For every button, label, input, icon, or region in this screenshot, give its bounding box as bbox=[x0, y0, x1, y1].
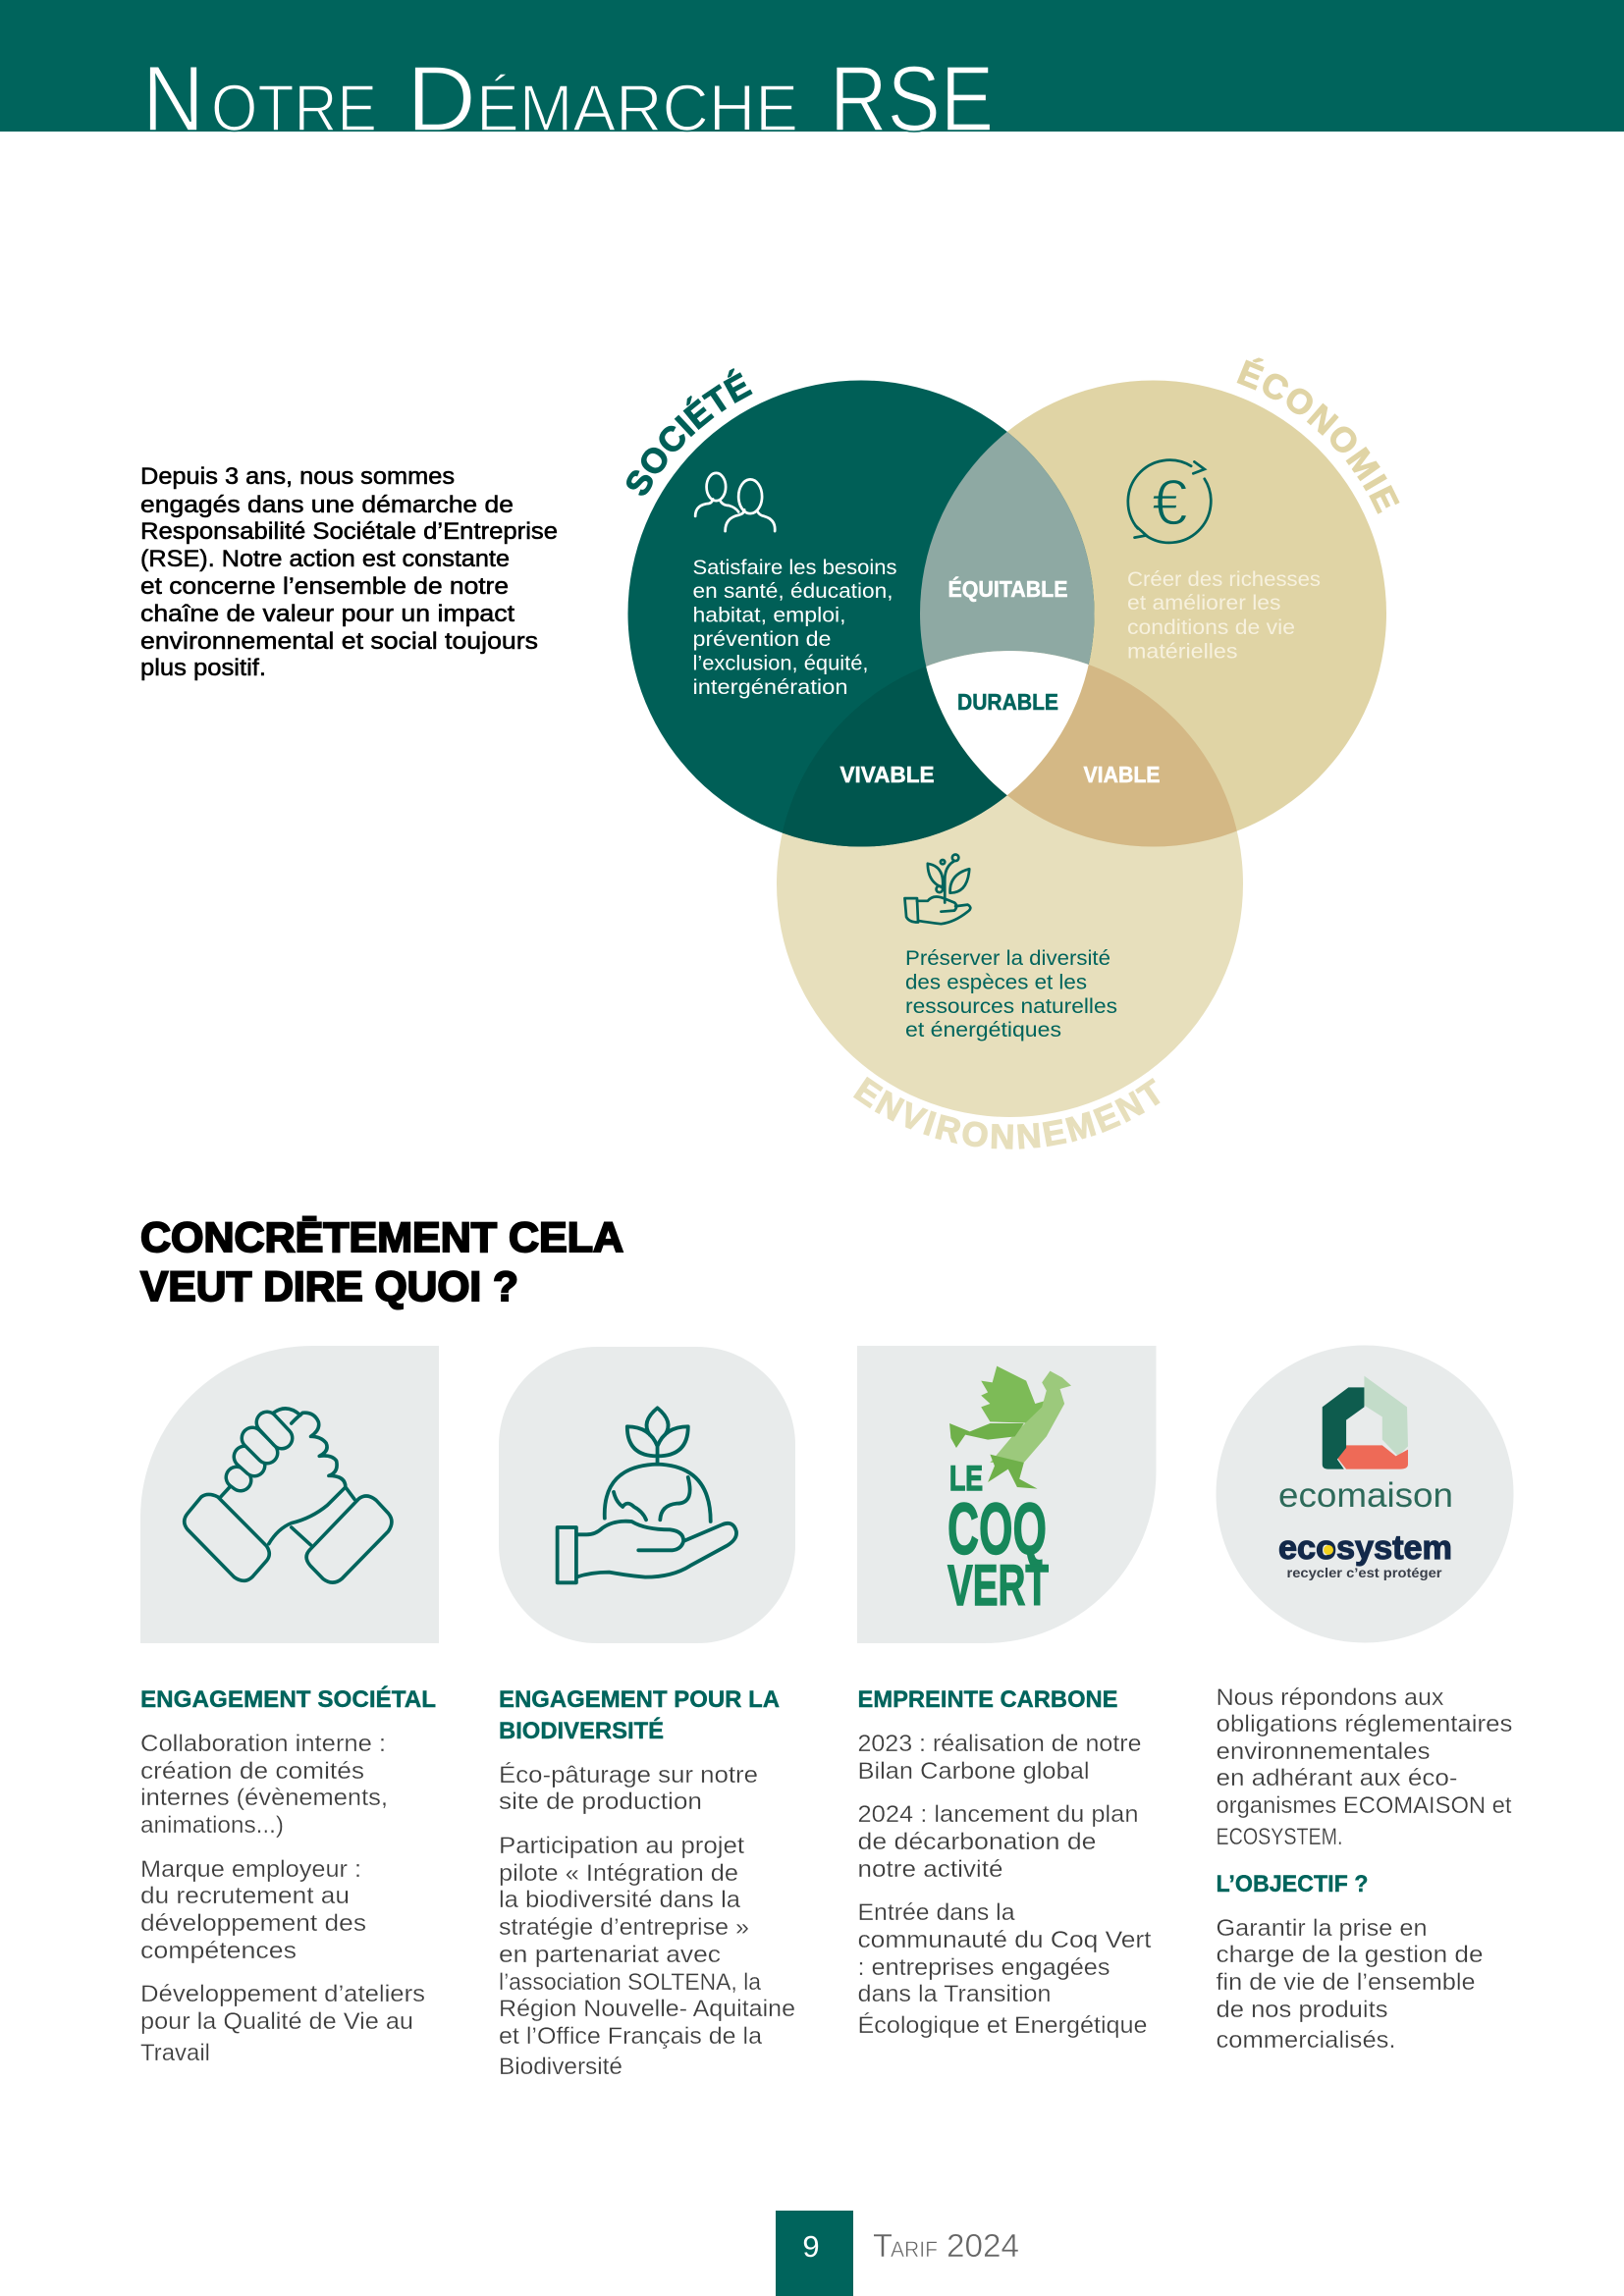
footer label: T bbox=[873, 2227, 893, 2264]
panel: handshake bbox=[140, 1346, 439, 1643]
body: Écologique et Energétique bbox=[858, 2012, 1147, 2039]
text: environnement bbox=[905, 946, 1117, 1041]
logo text: le coq vert: COQ bbox=[947, 1488, 1047, 1570]
intro text block: engagés dans une démarche de bbox=[140, 492, 514, 518]
label: équitable: ÉQUITABLE bbox=[948, 575, 1068, 602]
body: et l’Office Français de la bbox=[499, 2023, 763, 2050]
icon: handshake bbox=[185, 1409, 392, 1582]
body: objectif: fin de vie de l’ensemble bbox=[1216, 1969, 1475, 1996]
circle: environnement bbox=[777, 651, 1243, 1117]
text: économie: conditions de vie bbox=[1127, 615, 1295, 639]
body: Biodiversité bbox=[499, 2054, 623, 2080]
body: dans la Transition bbox=[858, 1981, 1051, 2007]
intro text block: chaîne de valeur pour un impact bbox=[140, 601, 514, 627]
body: Éco-pâturage sur notre bbox=[499, 1762, 758, 1789]
text: société: prévention de bbox=[693, 627, 831, 651]
heading: ENGAGEMENT SOCIÉTAL bbox=[140, 1685, 436, 1713]
logo text: ecomaison: ecomaison bbox=[1278, 1476, 1453, 1515]
body: Bilan Carbone global bbox=[858, 1758, 1090, 1785]
label: vivable: VIVABLE bbox=[840, 762, 935, 787]
heading: EMPREINTE CARBONE bbox=[858, 1686, 1117, 1713]
title: N bbox=[142, 47, 204, 151]
text: société: en santé, éducation, bbox=[693, 579, 893, 603]
logo: ecomaison house bbox=[1323, 1376, 1408, 1469]
text: environnement: et énergétiques bbox=[905, 1018, 1061, 1041]
text: économie: matérielles bbox=[1127, 640, 1237, 664]
text: environnement: ressources naturelles bbox=[905, 994, 1117, 1018]
body: Travail bbox=[140, 2040, 210, 2066]
body: Nous répondons aux bbox=[1216, 1684, 1443, 1711]
body: notre activité bbox=[858, 1856, 1003, 1883]
text: société: intergénération bbox=[693, 675, 848, 699]
logo text: le coq vert: LE bbox=[949, 1460, 983, 1498]
body bbox=[140, 1731, 425, 2066]
text: société: l’exclusion, équité, bbox=[693, 652, 868, 675]
heading bbox=[499, 1686, 780, 1744]
column: obligations bbox=[1216, 1684, 1512, 2054]
text: économie: Créer des richesses bbox=[1127, 567, 1321, 591]
body: Collaboration interne : bbox=[140, 1731, 386, 1757]
logo tagline: recycler c’est protéger bbox=[1286, 1565, 1442, 1580]
body: : entreprises engagées bbox=[858, 1954, 1110, 1981]
column: engagement sociétal bbox=[140, 1685, 436, 2066]
body: stratégie d’entreprise » bbox=[499, 1914, 749, 1941]
body: objectif bbox=[1216, 1915, 1483, 2054]
logo text: le coq vert: VERT bbox=[947, 1554, 1049, 1618]
body: pilote « Intégration de bbox=[499, 1860, 738, 1887]
text: économie bbox=[1127, 567, 1321, 664]
body: l’association SOLTENA, la bbox=[499, 1969, 762, 1996]
body: développement des bbox=[140, 1910, 366, 1937]
intro text block: environnemental et social toujours bbox=[140, 628, 538, 655]
text: société bbox=[693, 556, 897, 699]
footer label: 2024 bbox=[947, 2227, 1019, 2264]
body: communauté du Coq Vert bbox=[858, 1927, 1152, 1953]
text: environnement: Préserver la diversité bbox=[905, 946, 1110, 970]
body: de décarbonation de bbox=[858, 1829, 1096, 1855]
footer page number: 9 bbox=[802, 2229, 820, 2264]
arc label: économie: ÉCONOMIE bbox=[1237, 357, 1400, 514]
venn diagram bbox=[626, 357, 1400, 1149]
heading: objectif: L’OBJECTIF ? bbox=[1216, 1871, 1369, 1897]
overlap: durable bbox=[926, 651, 1089, 795]
body bbox=[858, 1731, 1152, 2039]
body: pour la Qualité de Vie au bbox=[140, 2008, 413, 2035]
body: en adhérant aux éco- bbox=[1216, 1765, 1457, 1791]
fingers bbox=[237, 1422, 282, 1480]
icon: people bbox=[695, 473, 775, 531]
footer label: ARIF bbox=[891, 2237, 938, 2262]
body bbox=[499, 1762, 795, 2080]
intro text block: Responsabilité Sociétale d’Entreprise bbox=[140, 518, 558, 545]
body: 2024 : lancement du plan bbox=[858, 1801, 1139, 1828]
body: organismes ECOMAISON et bbox=[1216, 1792, 1512, 1819]
body: obligations réglementaires bbox=[1216, 1711, 1512, 1737]
intro text block: plus positif. bbox=[140, 655, 266, 681]
body: Région Nouvelle- Aquitaine bbox=[499, 1996, 795, 2022]
icon: euro cycle: € bbox=[1152, 467, 1188, 540]
intro text block: (RSE). Notre action est constante bbox=[140, 546, 510, 572]
body: création de comités bbox=[140, 1758, 364, 1785]
body: compétences bbox=[140, 1938, 297, 1964]
panel: biodiversity bbox=[499, 1347, 795, 1643]
body: animations...) bbox=[140, 1812, 284, 1839]
section heading: VEUT DIRE QUOI ? bbox=[140, 1263, 518, 1310]
body: du recrutement au bbox=[140, 1883, 350, 1909]
body: 2023 : réalisation de notre bbox=[858, 1731, 1141, 1757]
section heading: CONCRĒTEMENT CELA bbox=[140, 1214, 623, 1261]
overlap: vivable bbox=[783, 651, 1088, 846]
panel: ecomaison ecosystem bbox=[1216, 1345, 1514, 1643]
arc label: société: SOCIÉTÉ bbox=[626, 368, 753, 496]
body: Participation au projet bbox=[499, 1833, 744, 1859]
panel: le coq vert bbox=[857, 1346, 1157, 1643]
text: économie: et améliorer les bbox=[1127, 591, 1280, 614]
logo: rooster bbox=[949, 1366, 1071, 1489]
text: société: habitat, emploi, bbox=[693, 603, 846, 626]
body: Entrée dans la bbox=[858, 1899, 1015, 1926]
body bbox=[1216, 1684, 1512, 1850]
logo dot bbox=[1324, 1545, 1333, 1555]
logo text: ecosystem: ecosystem bbox=[1278, 1529, 1452, 1567]
title: OTRE bbox=[211, 72, 377, 145]
overlap: équitable bbox=[920, 432, 1094, 667]
title: ÉMARCHE bbox=[476, 72, 798, 145]
title: RSE bbox=[830, 47, 994, 151]
logo text: le coq vert bbox=[947, 1460, 1049, 1618]
icon: globe in hand bbox=[558, 1408, 736, 1582]
circle: économie bbox=[920, 381, 1386, 846]
body: site de production bbox=[499, 1789, 702, 1815]
footer page number bbox=[776, 2211, 853, 2296]
title: D bbox=[406, 47, 476, 151]
header band bbox=[0, 0, 1624, 132]
body: objectif: commercialisés. bbox=[1216, 2027, 1396, 2054]
label: viable: VIABLE bbox=[1084, 762, 1161, 787]
text: environnement: des espèces et les bbox=[905, 970, 1087, 993]
body: objectif: de nos produits bbox=[1216, 1997, 1388, 2023]
column: empreinte carbone bbox=[858, 1686, 1152, 2039]
icon: euro cycle bbox=[1128, 460, 1211, 543]
label: durable: DURABLE bbox=[957, 689, 1058, 715]
column: engagement biodiversité bbox=[499, 1686, 795, 2080]
body: objectif: charge de la gestion de bbox=[1216, 1942, 1483, 1968]
arc label: environnement: ENVIRONNEMENT bbox=[853, 1076, 1161, 1149]
text: société: Satisfaire les besoins bbox=[693, 556, 897, 579]
body: la biodiversité dans la bbox=[499, 1887, 741, 1913]
circle: société bbox=[628, 381, 1094, 846]
body: environnementales bbox=[1216, 1738, 1430, 1765]
body: en partenariat avec bbox=[499, 1942, 721, 1968]
intro text block bbox=[140, 463, 558, 681]
intro text block: Depuis 3 ans, nous sommes bbox=[140, 463, 455, 490]
body: Développement d’ateliers bbox=[140, 1981, 425, 2007]
section heading bbox=[140, 1214, 623, 1310]
body: internes (évènements, bbox=[140, 1785, 388, 1811]
heading: ENGAGEMENT POUR LA bbox=[499, 1686, 780, 1713]
intro text block: et concerne l’ensemble de notre bbox=[140, 573, 509, 600]
overlap: viable bbox=[926, 651, 1237, 846]
heading: BIODIVERSITÉ bbox=[499, 1717, 664, 1744]
body: objectif: Garantir la prise en bbox=[1216, 1915, 1428, 1942]
body: ECOSYSTEM. bbox=[1216, 1824, 1343, 1850]
icon: plant in hand bbox=[904, 855, 970, 924]
body: Marque employeur : bbox=[140, 1856, 361, 1883]
